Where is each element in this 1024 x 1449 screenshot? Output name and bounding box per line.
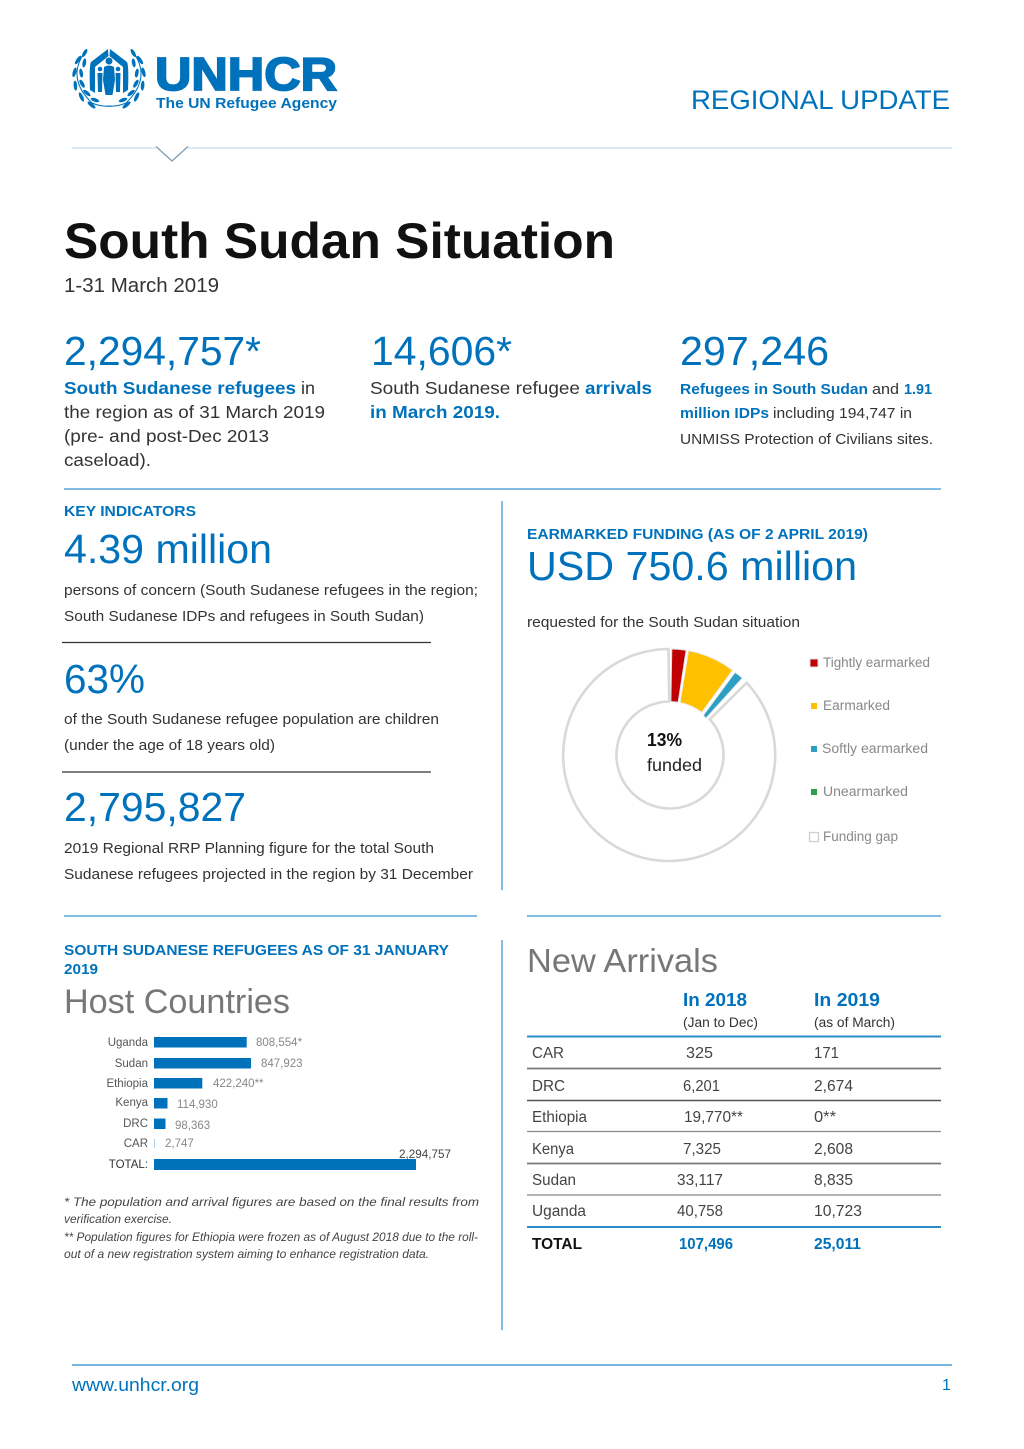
chevron (156, 146, 188, 161)
funding description: requested for the South Sudan situation (527, 614, 800, 631)
indicator: persons of concern (64, 526, 478, 625)
bar chart: 2,294,757 (399, 1149, 451, 1161)
bar chart: DRC (123, 1118, 148, 1130)
table: 33,117 (677, 1172, 723, 1189)
page number: 1 (942, 1377, 951, 1394)
indicator: children: of the South Sudanese refugee population are children (64, 711, 439, 728)
table: 0** (814, 1109, 836, 1126)
chart legend: Unearmarked (823, 784, 908, 799)
stat: refugees and IDPs in South Sudan (680, 328, 933, 448)
chart legend (810, 655, 930, 844)
table: In 2018 (683, 990, 747, 1010)
bar chart (106, 1037, 451, 1171)
stat: refugees in the region: in (301, 378, 315, 398)
stat: refugees and IDPs in South Sudan: 297,246 (680, 328, 829, 374)
table: 7,325 (683, 1141, 721, 1158)
logo tagline: The UN Refugee Agency (156, 96, 337, 112)
table: Uganda (532, 1203, 586, 1220)
footnotes: out of a new registration system aiming to enhance registration data. (64, 1249, 429, 1261)
table: 6,201 (683, 1078, 720, 1095)
bar chart: Ethiopia (106, 1078, 149, 1090)
stat: refugees in the region: South Sudanese refugees (64, 378, 296, 398)
stat: refugees and IDPs in South Sudan: million IDPs (680, 405, 769, 422)
footnotes (64, 1197, 479, 1261)
table: TOTAL (532, 1236, 582, 1253)
table: 19,770** (684, 1109, 743, 1126)
table: 171 (814, 1045, 839, 1062)
heading: 2019 (64, 962, 98, 978)
stat: refugees and IDPs in South Sudan: Refugees in South Sudan (680, 381, 868, 398)
donut centre label (647, 730, 702, 775)
table: 325 (686, 1045, 713, 1062)
footer (71, 1365, 952, 1395)
table: Kenya (532, 1141, 574, 1158)
heading (64, 943, 449, 978)
title: South Sudan Situation (64, 213, 615, 269)
donut chart (563, 649, 775, 861)
icon: UNHCR emblem (71, 48, 147, 110)
table: In 2019 (814, 990, 880, 1010)
logo wordmark: UNHCR (155, 48, 337, 100)
stat: refugees in the region: the region as of 31 March 2019 (64, 402, 325, 422)
stat: refugees in the region: 2,294,757* (64, 328, 261, 374)
stat: refugees in the region (64, 328, 325, 470)
bar chart: Uganda (108, 1037, 149, 1049)
bar chart: 847,923 (261, 1058, 303, 1070)
stat: refugees and IDPs in South Sudan: and (872, 381, 899, 398)
indicator: children (64, 656, 439, 754)
footnotes: ** Population figures for Ethiopia were frozen as of August 2018 due to the roll- (64, 1232, 478, 1244)
table: 8,835 (814, 1172, 853, 1189)
footnotes: * The population and arrival figures are based on the final results from (64, 1197, 479, 1209)
table: CAR (532, 1045, 564, 1062)
heading: SOUTH SUDANESE REFUGEES AS OF 31 JANUARY (64, 943, 449, 959)
bar chart: TOTAL: (109, 1159, 148, 1171)
bar chart: 98,363 (175, 1120, 210, 1132)
table: 10,723 (814, 1203, 862, 1220)
bar chart: 114,930 (177, 1099, 218, 1111)
panel: host countries (64, 943, 479, 1261)
indicator: persons of concern: persons of concern (South Sudanese refugees in the region; (64, 582, 478, 599)
indicator: planning figure: 2019 Regional RRP Planning figure for the total South (64, 840, 434, 857)
panel: key indicators (62, 504, 478, 883)
indicator: persons of concern: 4.39 million (64, 526, 272, 572)
table: (Jan to Dec) (683, 1015, 758, 1030)
chart legend: Funding gap (823, 829, 898, 844)
bar chart: Kenya (115, 1097, 149, 1109)
heading: KEY INDICATORS (64, 504, 196, 520)
indicator: planning figure: 2,795,827 (64, 784, 246, 830)
donut centre label: 13% (647, 730, 682, 750)
date: 1-31 March 2019 (64, 275, 219, 297)
table: (as of March) (814, 1015, 895, 1030)
header (71, 48, 952, 161)
footnotes: verification exercise. (64, 1214, 172, 1226)
table: Sudan (532, 1172, 576, 1189)
heading: EARMARKED FUNDING (AS OF 2 APRIL 2019) (527, 527, 868, 543)
table: DRC (532, 1078, 565, 1095)
stat: refugees and IDPs in South Sudan: including 194,747 in (773, 405, 912, 422)
indicator: planning figure: Sudanese refugees projected in the region by 31 December (64, 866, 473, 883)
panel: new arrivals (527, 942, 941, 1253)
heading: New Arrivals (527, 942, 718, 979)
bar chart: 2,747 (165, 1138, 194, 1150)
chart legend: Softly earmarked (822, 741, 928, 756)
website: www.unhcr.org (71, 1375, 199, 1395)
stat: refugees and IDPs in South Sudan: 1.91 (904, 381, 932, 398)
indicator: children: (under the age of 18 years old) (64, 737, 275, 754)
stat: refugees in the region: (pre- and post-Dec 2013 (64, 426, 269, 446)
chart legend: Tightly earmarked (823, 655, 930, 670)
indicator: persons of concern: South Sudanese IDPs and refugees in South Sudan) (64, 608, 424, 625)
bar chart: CAR (124, 1138, 148, 1150)
funding amount: USD 750.6 million (527, 543, 857, 589)
bar chart: 808,554* (256, 1037, 303, 1049)
stat: arrivals: 14,606* (371, 328, 512, 374)
table: Ethiopia (532, 1109, 587, 1126)
stat: arrivals: arrivals (585, 378, 652, 398)
chart legend: Earmarked (823, 698, 890, 713)
indicator: children: 63% (64, 656, 145, 702)
subheading: Host Countries (64, 983, 290, 1021)
stat: refugees in the region: caseload). (64, 450, 151, 470)
indicator: planning figure (64, 784, 473, 883)
report type: REGIONAL UPDATE (691, 85, 950, 115)
table: 2,674 (814, 1078, 853, 1095)
panel: earmarked funding (527, 527, 930, 861)
table: 107,496 (679, 1236, 733, 1253)
stat: arrivals: South Sudanese refugee (370, 378, 580, 398)
stat: arrivals (370, 328, 652, 422)
table: 2,608 (814, 1141, 853, 1158)
table: 25,011 (814, 1236, 861, 1253)
stat: refugees and IDPs in South Sudan: UNMISS Protection of Civilians sites. (680, 431, 933, 448)
bar chart: Sudan (115, 1058, 148, 1070)
donut centre label: funded (647, 755, 702, 775)
table (527, 990, 941, 1253)
stat: arrivals: in March 2019. (370, 402, 500, 422)
bar chart: 422,240** (213, 1078, 264, 1090)
table: 40,758 (677, 1203, 723, 1220)
